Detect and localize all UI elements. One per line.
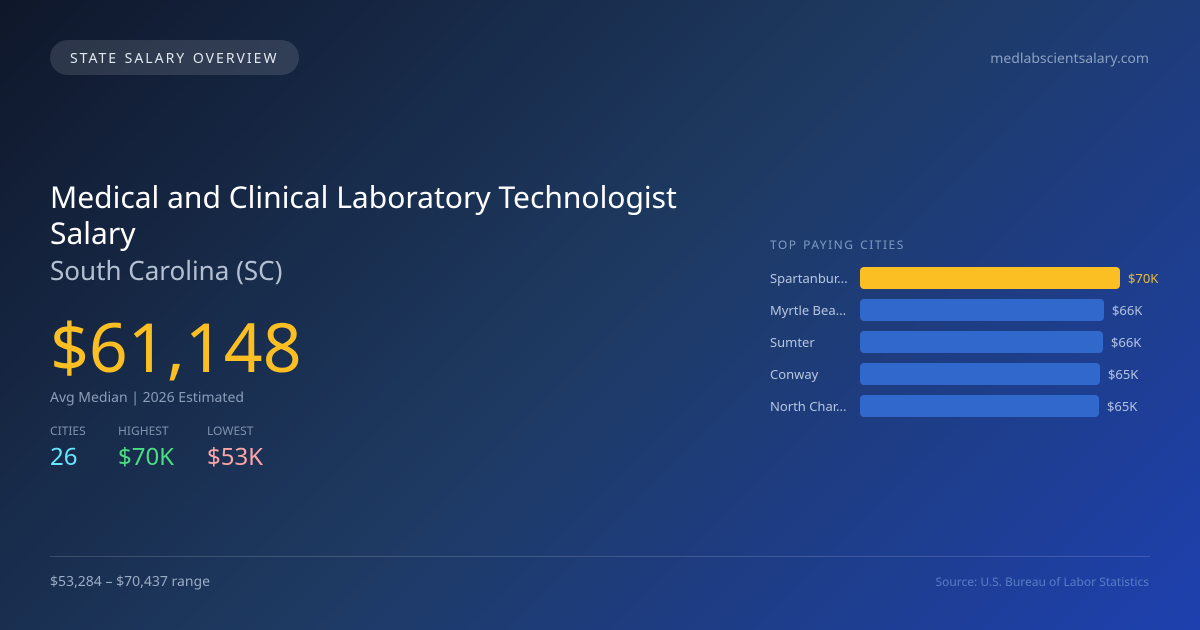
stat: lowest	[207, 422, 263, 473]
headline salary figure: $61,148	[50, 299, 302, 392]
city label: Conway: Conway	[770, 365, 818, 383]
stat label: HIGHEST	[118, 422, 169, 439]
value: Spartanburg: $70K	[1128, 269, 1158, 287]
bar: Conway	[860, 363, 1100, 385]
salary range: $53,284 – $70,437 range	[50, 572, 210, 591]
bar: Spartanburg	[860, 267, 1120, 289]
stat value: $53K	[207, 440, 263, 473]
bar: Sumter	[860, 331, 1103, 353]
salary caption: Avg Median | 2026 Estimated	[50, 388, 244, 407]
city label: Sumter: Sumter	[770, 333, 815, 351]
value: Conway: $65K	[1108, 365, 1138, 383]
city label: North Charleston: North Char...	[770, 397, 847, 415]
stat: cities	[50, 422, 86, 473]
value: Myrtle Beach: $66K	[1112, 301, 1142, 319]
subtitle: state: South Carolina (SC)	[50, 252, 282, 288]
city label: Spartanburg: Spartanbur...	[770, 269, 848, 287]
stat value: 26	[50, 440, 77, 473]
stat label: CITIES	[50, 422, 86, 439]
value: Sumter: $66K	[1111, 333, 1141, 351]
value: North Charleston: $65K	[1107, 397, 1137, 415]
stat: highest	[118, 422, 174, 473]
stat label: LOWEST	[207, 422, 253, 439]
bar: North Charleston	[860, 395, 1099, 417]
badge: state salary overview	[50, 40, 299, 75]
city label: Myrtle Beach: Myrtle Bea...	[770, 301, 846, 319]
title: Medical and Clinical Laboratory Technologist Salary	[50, 176, 677, 253]
source: Source: U.S. Bureau of Labor Statistics	[936, 573, 1149, 590]
site name: medlabscientsalary.com	[990, 49, 1149, 68]
bar: Myrtle Beach	[860, 299, 1104, 321]
chart heading: TOP PAYING CITIES	[770, 236, 905, 253]
badge label: STATE SALARY OVERVIEW	[70, 49, 278, 68]
stat value: $70K	[118, 440, 174, 473]
